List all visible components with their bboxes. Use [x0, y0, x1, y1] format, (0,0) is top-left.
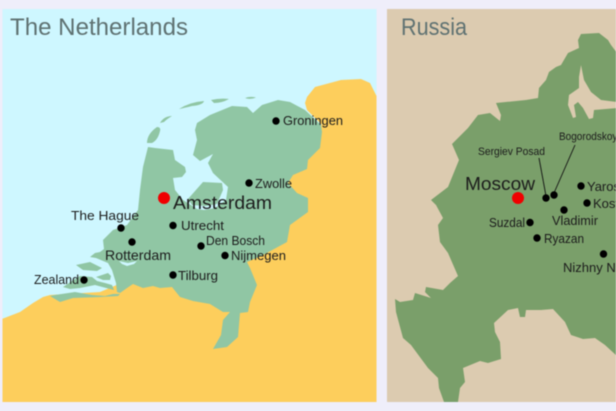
city: Bogorodskoye with leader line: [550, 131, 616, 199]
city: The Hague: The Hague: [71, 208, 139, 223]
city: Groningen: Groningen: [283, 113, 343, 128]
city: Rotterdam: Rotterdam: [105, 247, 171, 263]
land background: [387, 9, 616, 402]
city: Nijmegen: Nijmegen: [231, 248, 286, 263]
city: Zealand: Zealand: [34, 272, 79, 287]
city: Nizhny Novgorod: [563, 250, 616, 275]
city: Amsterdam: Amsterdam: [173, 193, 272, 213]
city: Utrecht: Utrecht: [181, 218, 224, 233]
panel: The Netherlands map: [2, 9, 377, 403]
city: The Hague: [71, 208, 139, 232]
city: Sergiev Posad with leader line: Sergiev Posad: [478, 146, 545, 158]
land: Zealand islands: [50, 262, 120, 302]
land: Netherlands mainland: [90, 100, 322, 349]
city: Vladimir: Vladimir: [552, 213, 599, 228]
water: northern bay: [568, 65, 616, 119]
water: Rotterdam harbour: [119, 261, 137, 266]
city: Den Bosch: Den Bosch: [206, 233, 265, 248]
city: Zealand: [34, 274, 88, 285]
city: Zwolle: Zwolle: [255, 176, 292, 191]
land: neighbouring countries: [2, 79, 377, 403]
city: Moscow: [465, 174, 536, 204]
city: Tilburg: Tilburg: [178, 268, 218, 283]
panel: Russia map: [387, 9, 616, 402]
city: Ryazan: Ryazan: [544, 231, 584, 246]
city: Utrecht: [168, 220, 224, 231]
land: Wadden islands: [147, 97, 256, 143]
city: Moscow: Moscow: [465, 174, 536, 194]
region: western Russia: [395, 33, 616, 402]
title: The Netherlands: The Netherlands: [10, 14, 188, 41]
city: Rotterdam: [105, 238, 171, 263]
sea background: [2, 8, 377, 318]
land: Flevoland: [188, 182, 223, 206]
title: Russia: Russia: [401, 14, 468, 41]
city: Vladimir: [552, 206, 599, 228]
city: Sergiev Posad with leader line: [478, 146, 550, 202]
city: Suzdal: Suzdal: [489, 215, 525, 230]
city: Zwolle: [244, 178, 292, 189]
